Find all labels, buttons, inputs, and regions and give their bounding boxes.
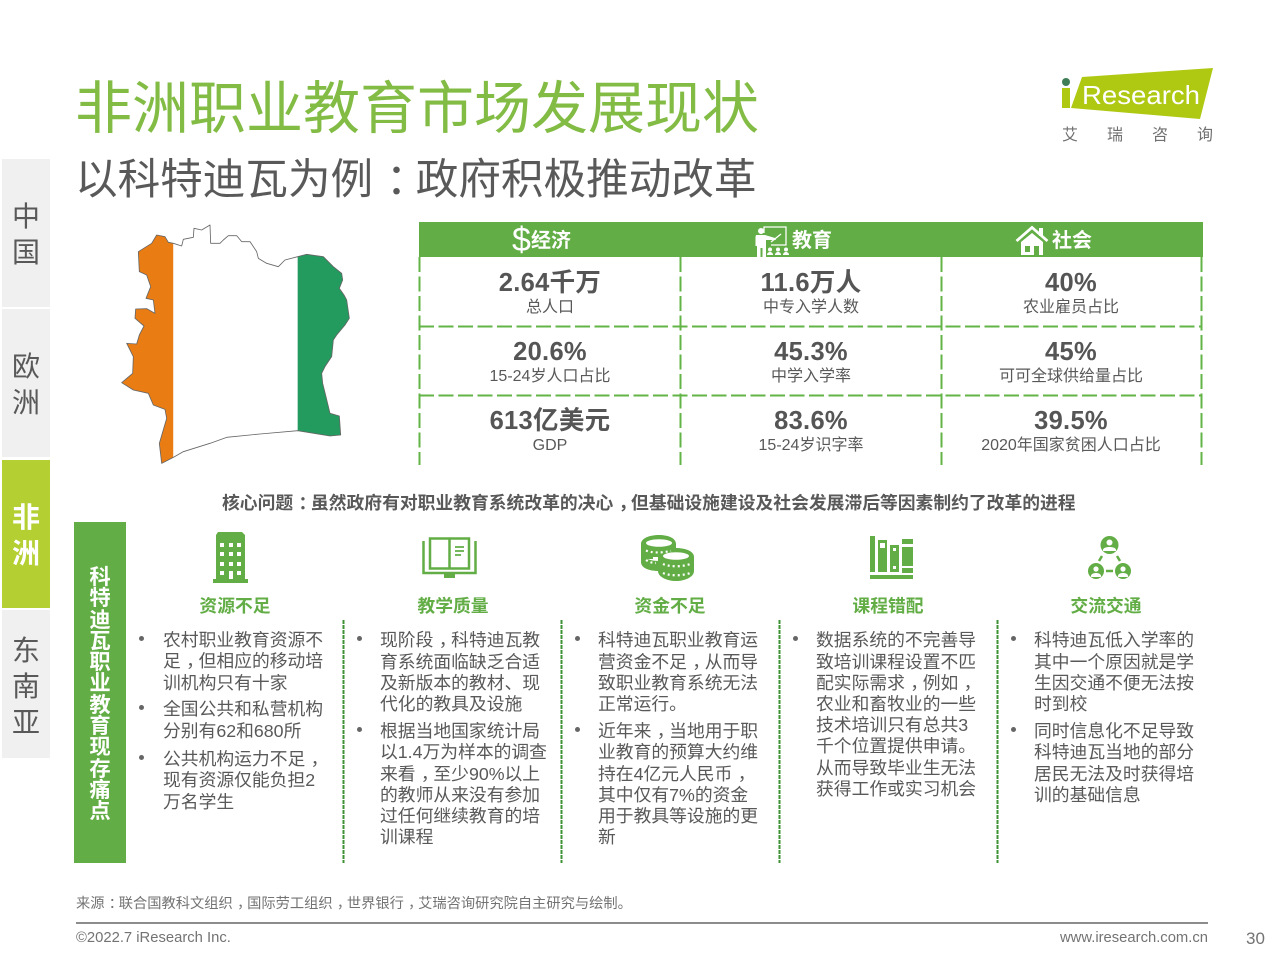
cell: cocoa supply: 45% [1045,338,1097,366]
bullet text: 数据系统的不完善导 [816,630,976,650]
bullet text: 科特迪瓦当地的部分 [1034,742,1194,762]
page number: 30 [1246,929,1265,948]
bullet text: 科特迪瓦职业教育运 [598,630,758,650]
bullet text: 万名学生 [163,792,234,812]
cell: total population: 2.64千万 [499,269,601,297]
bullet text: 过任何继续教育的培 [380,806,540,826]
bullet text: 生因交通不便无法按 [1034,673,1194,693]
icon: dollar: $ [512,221,531,259]
bullet text: 从而导致毕业生无法 [816,758,976,778]
bullet text: 以1.4万为样本的调查 [380,742,547,762]
bullet text: 农业和畜牧业的一些 [816,694,976,714]
tab: Africa (active): 非 [12,502,40,533]
cell: youth population [490,338,610,385]
heading: 资金不足 [634,596,706,616]
bullet text: 其中仅有7%的资金 [598,785,748,805]
panel: pain points label: 教 [89,693,111,717]
bullet text: 致培训课程设置不匹 [816,652,976,672]
sidebar: regions [2,159,50,758]
bullet text: 育系统面临缺乏合适 [380,652,540,672]
tab: Europe: 洲 [12,387,40,418]
header: education: 教育 [792,230,832,252]
bullet text: 业教育的预算大约维 [598,742,758,762]
cell: agricultural employment: 农业雇员占比 [1023,299,1119,316]
cell: secondary enrolment [771,338,851,385]
heading: 交流交通 [1070,596,1142,616]
tab: Southeast Asia: 东 [12,635,40,666]
website: www.iresearch.com.cn [1060,930,1208,946]
cell: poverty [981,407,1161,454]
cell: cocoa supply: 可可全球供给量占比 [999,368,1143,385]
bullet text: 的教师从来没有参加 [380,785,540,805]
icon: books [870,536,913,579]
tab: Southeast Asia: 亚 [12,707,40,738]
cell: agricultural employment: 40% [1045,269,1097,297]
bullet text: 技术培训只有总共3 [816,715,968,735]
bullet text: 正常运行。 [598,694,687,714]
logo: iResearch: 瑞 [1107,121,1123,145]
cell: total population: 总人口 [526,299,574,316]
bullet text [357,630,547,847]
cell: literacy [759,407,863,454]
logo: iResearch: 询 [1197,121,1213,145]
bullet text [1011,630,1194,805]
heading: 教学质量 [417,596,489,616]
cell: literacy: 15-24岁识字率 [759,437,863,454]
tab: Europe [2,309,50,457]
logo: iResearch: 艾 [1062,121,1078,145]
bullet text: 训课程 [380,827,433,847]
cell: poverty: 39.5% [1034,407,1108,435]
panel: pain points label: 业 [89,671,111,695]
cell: youth population: 15-24岁人口占比 [490,368,610,385]
panel: data table [418,221,1203,465]
bullet text [793,630,981,799]
cell: GDP: 613亿美元 [490,407,610,435]
bullet text: 其中一个原因就是学 [1034,652,1194,672]
cell: total population [499,269,601,316]
bullet text: 足 ，但相应的移动培 [163,651,323,671]
subtitle: 以科特迪瓦为例 ：政府积极推动改革 [75,156,756,204]
panel: pain points label: 迪 [89,608,111,632]
table header bar [419,222,1203,257]
bullet text: 现有资源仅能负担2 [163,770,315,790]
tab: Southeast Asia [2,610,50,758]
column: transport [1011,536,1194,805]
bullet text: 现阶段 ，科特迪瓦教 [380,630,540,650]
bullet text: 近年来 ，当地用于职 [598,721,758,741]
cell: vocational enrolment [760,269,862,316]
bullet text: 时到校 [1034,694,1087,714]
map: Cote d'Ivoire flag [121,224,350,464]
cell: youth population: 20.6% [513,338,587,366]
cell: vocational enrolment: 11.6万人 [760,269,862,297]
cell: agricultural employment [1023,269,1119,316]
tab: China: 中 [12,201,40,232]
tab: China: 国 [12,237,40,268]
bullet text: 新 [598,827,616,847]
cell: poverty: 2020年国家贫困人口占比 [981,437,1161,454]
header: society: 社会 [1052,230,1092,252]
tab: Europe: 欧 [12,351,40,382]
bullet text: 致职业教育系统无法 [598,673,758,693]
panel: pain points label [74,522,126,863]
icon: coins [641,535,694,581]
bullet text: 居民无法及时获得培 [1034,764,1194,784]
bullet text: 同时信息化不足导致 [1034,721,1194,741]
bullet text: 来看 ，至少90%以上 [380,764,540,784]
heading: 资源不足 [199,596,271,616]
panel: pain points label: 点 [89,799,111,823]
panel: pain points label: 职 [89,650,111,674]
cell: secondary enrolment: 45.3% [774,338,848,366]
bullet text: 持在4亿元人民币 ， [598,764,755,784]
panel: pain points label: 育 [89,714,111,738]
cell: literacy: 83.6% [774,407,848,435]
core issue statement: 核心问题 ：虽然政府有对职业教育系统改革的决心 ，但基础设施建设及社会发展滞后等因素制约了改革的进程 [222,493,1076,513]
bullet text: 及新版本的教材、现 [380,673,540,693]
cell: cocoa supply [999,338,1143,385]
panel: pain points label: 瓦 [89,629,111,653]
bullet text: 营资金不足 ，从而导 [598,652,758,672]
tab: Southeast Asia: 南 [12,671,40,702]
cell: secondary enrolment: 中学入学率 [771,368,851,385]
bullet text: 科特迪瓦低入学率的 [1034,630,1194,650]
panel: pain points label: 科 [89,565,111,589]
heading: 课程错配 [852,596,924,616]
logo: iResearch: Research [1082,80,1200,110]
bullet text: 公共机构运力不足 ， [163,749,328,769]
title: 非洲职业教育市场发展现状 [75,77,759,141]
bullet text: 配实际需求 ，例如 ， [816,673,981,693]
panel: pain points label: 存 [89,757,111,781]
tab: Africa (active): 洲 [12,538,40,569]
bullet text: 全国公共和私营机构 [163,699,323,719]
tab: China [2,159,50,307]
bullet text: 分别有62和680所 [163,721,301,741]
bullet text: 训机构只有十家 [163,673,287,693]
panel: pain points label: 现 [89,735,111,759]
bullet text: 根据当地国家统计局 [380,721,540,741]
bullet text: 训的基础信息 [1034,785,1141,805]
logo: iResearch: 咨 [1152,121,1168,145]
cell: vocational enrolment: 中专入学人数 [763,299,859,316]
bullet text [139,630,328,812]
icon: teacher [756,226,789,257]
table dashed grid [418,257,1202,465]
logo: iResearch [1062,68,1213,145]
cell: GDP [490,406,610,454]
icon: house [1016,226,1048,255]
bullet text [575,630,758,847]
column: curriculum mismatch [793,536,981,799]
icon: connected people [1088,536,1131,579]
column: resource shortage [139,532,328,812]
column dividers [342,620,998,863]
cell: GDP: GDP [533,437,567,454]
source note: 来源 ：联合国教科文组织 ，国际劳工组织 ，世界银行 ，艾瑞咨询研究院自主研究与绘制。 [76,896,632,912]
panel: pain points label: 痛 [89,778,111,802]
column: teaching quality [357,537,547,847]
bullet text: 农村职业教育资源不 [163,630,323,650]
bullet text: 用于教具等设施的更 [598,806,758,826]
column: funding shortage [575,535,758,847]
bullet text: 代化的教具及设施 [380,694,522,714]
copyright: ©2022.7 iResearch Inc. [76,930,231,946]
bullet text: 千个位置提供申请。 [816,736,976,756]
tab: Africa (active) [2,460,50,608]
icon: building [213,532,248,583]
panel: pain points label: 特 [89,586,111,610]
header: economy: 经济 [531,230,571,252]
bullet text: 获得工作或实习机会 [816,779,976,799]
icon: open book [422,537,477,578]
